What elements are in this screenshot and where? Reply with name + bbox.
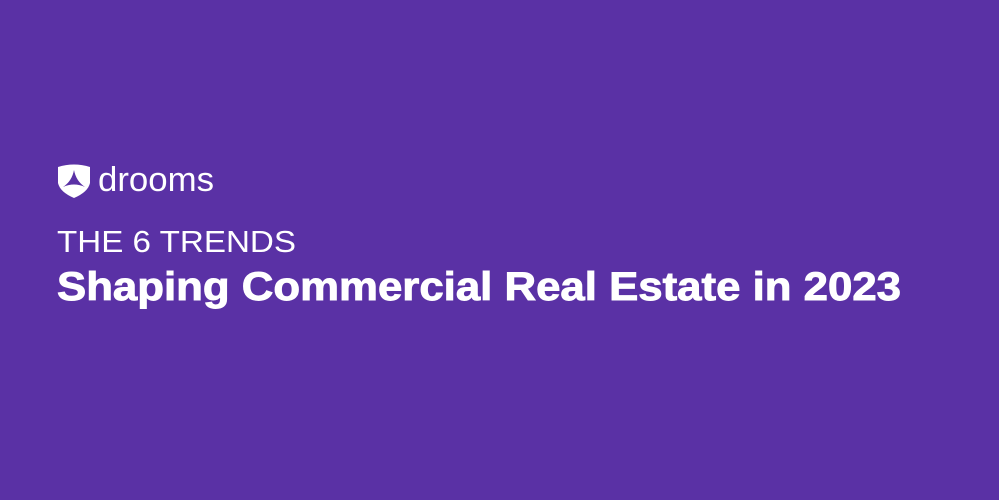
title: Shaping Commercial Real Estate in 2023 — [57, 265, 901, 309]
logo: drooms — [58, 161, 214, 199]
subtitle: THE 6 TRENDS — [57, 225, 296, 259]
icon: shield — [58, 164, 90, 198]
wordmark: drooms — [98, 161, 214, 199]
